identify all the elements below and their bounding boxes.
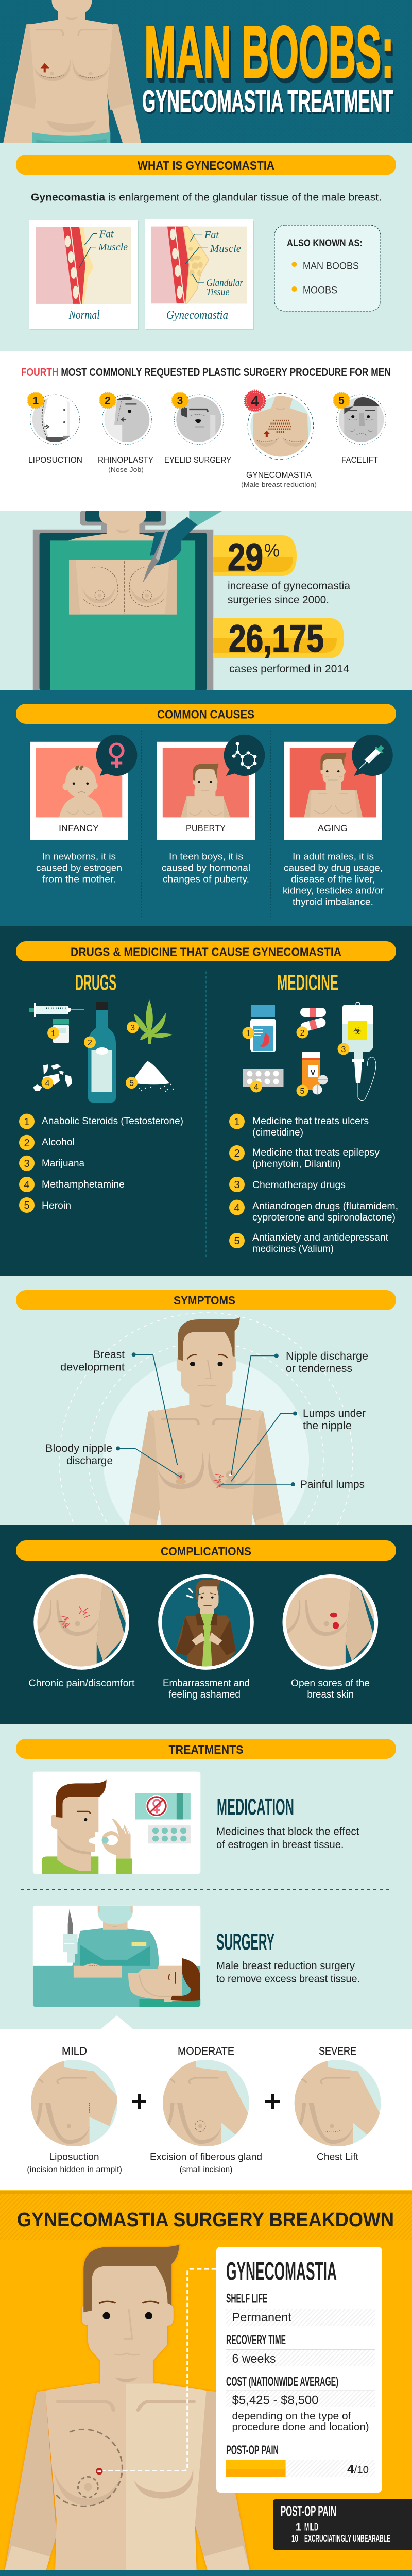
heading: complications: COMPLICATIONS xyxy=(161,1545,251,1558)
icon: mild chest xyxy=(29,2059,119,2147)
icon: alcohol bottle xyxy=(84,1002,116,1103)
list: medicine: (phenytoin, Dilantin) xyxy=(252,1159,341,1170)
label: glandular tissue: Glandular xyxy=(206,277,243,289)
text: aging cause: caused by drug usage, xyxy=(284,862,383,873)
icon: antiandrogen blister pack: 4 xyxy=(254,1083,259,1092)
icon: facelift xyxy=(337,395,386,444)
caption: gynecomastia: Gynecomastia xyxy=(166,309,228,322)
card: infancy xyxy=(30,735,137,840)
caption: excision: (small incision) xyxy=(180,2165,232,2174)
list: medicine: Antianxiety and antidepressant xyxy=(252,1232,389,1243)
panel: common causes xyxy=(0,690,412,926)
row: shelf life: Permanent xyxy=(232,2311,291,2325)
text: aging cause: disease of the liver, xyxy=(291,874,375,884)
label: bloody nipple discharge: Bloody nipple xyxy=(45,1443,112,1454)
card: puberty xyxy=(157,735,265,840)
text: medication description: Medicines that block the effect xyxy=(216,1826,359,1837)
row: recovery time: 6 weeks xyxy=(232,2352,276,2366)
stat text: increase since 2000 xyxy=(228,580,350,606)
icon: valium pill bottle xyxy=(297,1052,328,1096)
icon: embarrassed man xyxy=(160,1576,252,1671)
illustration: patient on operating table xyxy=(33,511,223,690)
panel: fourth most requested procedure xyxy=(22,368,390,488)
icon: syringe and steroid vial xyxy=(29,1003,84,1043)
text: surgery description: Male breast reduction surgery xyxy=(216,1960,355,1972)
stat text: increase since 2000: surgeries since 2000. xyxy=(228,594,329,606)
caption: embarrassment: feeling ashamed xyxy=(169,1689,241,1700)
text: infancy cause xyxy=(36,851,122,884)
icon: alcohol bottle: 2 xyxy=(88,1039,92,1047)
list: drugs: 2 xyxy=(24,1138,30,1149)
panel: surgery statistics xyxy=(0,511,412,690)
badge: number 4 xyxy=(245,391,265,411)
text: infancy cause: In newborns, it is xyxy=(42,851,116,861)
card: puberty: PUBERTY xyxy=(186,823,226,833)
icon: open sores chest xyxy=(284,1576,380,1671)
label: muscle: Muscle xyxy=(210,243,241,255)
list: medicine: Antiandrogen drugs (flutamidem, xyxy=(252,1201,398,1212)
list: drugs: Anabolic Steroids (Testosterone) xyxy=(42,1116,183,1127)
panel: footer xyxy=(0,2570,412,2576)
heading: medication: MEDICATION xyxy=(217,1794,294,1820)
label: fat: Fat xyxy=(204,229,219,241)
icon: chemotherapy IV bag xyxy=(338,1002,376,1101)
text: puberty cause: In teen boys, it is xyxy=(169,851,243,861)
card: aging xyxy=(284,735,393,840)
icon: chemotherapy IV bag: 3 xyxy=(341,1045,346,1054)
callout: also known as: MAN BOOBS xyxy=(303,261,359,272)
icon: gynecomastia chest xyxy=(248,393,314,462)
panel: drugs and medicine xyxy=(0,926,412,1276)
heading: drugs and medicine: DRUGS & MEDICINE THAT CAUSE GYNECOMASTIA xyxy=(71,945,341,959)
diagram card: normal breast xyxy=(29,220,139,330)
caption: excision xyxy=(150,2152,262,2174)
label: breast development: Breast xyxy=(93,1349,125,1361)
label: rhinoplasty: (Nose Job) xyxy=(108,466,144,473)
connector: incision to data card xyxy=(96,2269,216,2475)
badge: number 4: 4 xyxy=(251,393,259,409)
label: muscle: Muscle xyxy=(98,242,128,253)
stat pill: 29 percent xyxy=(213,535,297,579)
list: medicine: 5 xyxy=(234,1235,240,1247)
list: medicine: 4 xyxy=(234,1202,240,1214)
list: drugs: Alcohol xyxy=(42,1137,75,1148)
label: breast development: development xyxy=(60,1361,125,1374)
label: nipple discharge: Nipple discharge xyxy=(286,1350,368,1362)
text: medication description: of estrogen in breast tissue. xyxy=(216,1839,344,1851)
text: puberty cause: changes of puberty. xyxy=(163,874,249,884)
icon: ulcer medicine bottle xyxy=(242,1005,276,1052)
heading: gynecomastia surgery breakdown: GYNECOMASTIA SURGERY BREAKDOWN xyxy=(17,2209,394,2231)
data card: gynecomastia xyxy=(216,2247,382,2493)
row: cost: procedure done and location) xyxy=(232,2421,369,2433)
heading: what is gynecomastia xyxy=(16,155,396,175)
row: recovery time xyxy=(226,2333,375,2366)
label: lumps under nipple xyxy=(303,1408,366,1432)
label: rhinoplasty xyxy=(98,456,153,473)
label: painful lumps: Painful lumps xyxy=(300,1479,365,1490)
heading: common causes: COMMON CAUSES xyxy=(157,708,254,721)
badge: number 3: 3 xyxy=(177,395,183,407)
callout: also known as: ALSO KNOWN AS: xyxy=(287,238,363,249)
icon: marijuana leaf xyxy=(127,999,173,1044)
panel: surgery breakdown xyxy=(0,2190,412,2570)
definition text: Gynecomastia is enlargement of the glandular tissue of the male breast. xyxy=(31,192,382,203)
list: drugs: 4 xyxy=(24,1179,30,1191)
illustration: shirtless man with arrow and incision lines xyxy=(3,0,141,143)
pointer to surgery types xyxy=(100,2015,133,2029)
icon: eyelid surgery xyxy=(174,395,224,444)
caption: chest lift: Chest Lift xyxy=(317,2152,359,2163)
card: infancy: INFANCY xyxy=(59,823,99,833)
label: fat: Fat xyxy=(99,229,114,240)
list: medicine: 1 xyxy=(234,1116,240,1128)
label: liposuction: LIPOSUCTION xyxy=(28,456,82,465)
label: rhinoplasty: RHINOPLASTY xyxy=(98,456,153,465)
list: medicine: cyproterone and spironolactone) xyxy=(252,1212,396,1223)
leader lines xyxy=(116,1352,297,1486)
caption: embarrassment xyxy=(163,1678,250,1700)
caption: excision: Excision of fiberous gland xyxy=(150,2152,262,2163)
icon: plus xyxy=(132,2094,146,2109)
badge: number 3 xyxy=(172,393,188,408)
list: medicine xyxy=(229,1114,398,1255)
badge: number 5: 5 xyxy=(338,395,345,407)
illustration: surgeon with patient xyxy=(33,1906,200,2007)
list: drugs: Methamphetamine xyxy=(42,1179,125,1190)
diagram card: gynecomastia breast xyxy=(145,219,254,330)
text: aging cause: thyroid imbalance. xyxy=(293,896,373,907)
panel: header xyxy=(0,0,412,143)
icon: methamphetamine crystals xyxy=(33,1064,72,1091)
heading: treatments: TREATMENTS xyxy=(169,1743,243,1756)
icon: valium pill bottle: V xyxy=(310,1068,316,1077)
row: post-op pain bar: 4/10 xyxy=(347,2463,369,2477)
icon: syringe and steroid vial: 1 xyxy=(51,1029,56,1038)
illustration: man with symptom markers xyxy=(129,1317,284,1525)
list: medicine: Chemotherapy drugs xyxy=(252,1180,346,1191)
icon: heroin powder pile xyxy=(126,1061,174,1092)
label: bloody nipple discharge: discharge xyxy=(66,1455,113,1467)
label: nipple discharge xyxy=(286,1350,368,1375)
badge: number 5 xyxy=(334,393,349,408)
badge: number 1: 1 xyxy=(33,395,39,407)
list: medicine: 2 xyxy=(234,1148,240,1159)
label: eyelid surgery: EYELID SURGERY xyxy=(164,456,231,465)
legend: post-op pain scale: POST-OP PAIN xyxy=(281,2503,336,2519)
icon: capsules xyxy=(297,1008,327,1039)
text: medication description xyxy=(216,1826,359,1851)
heading: symptoms xyxy=(16,1290,396,1310)
icon: ulcer medicine bottle: 1 xyxy=(246,1029,251,1038)
stat pill: 26,175: 26,175 xyxy=(229,617,324,660)
badge: number 2: 2 xyxy=(105,395,111,407)
caption: liposuction xyxy=(27,2152,122,2174)
caption: liposuction: (incision hidden in armpit) xyxy=(27,2165,122,2174)
list: drugs: 3 xyxy=(24,1158,30,1170)
heading: treatments xyxy=(16,1739,396,1759)
caption: open sores xyxy=(291,1678,370,1700)
text: infancy cause: from the mother. xyxy=(42,874,116,884)
caption: chronic pain: Chronic pain/discomfort xyxy=(29,1678,135,1689)
list: drugs: Heroin xyxy=(42,1200,71,1211)
list: drugs xyxy=(19,1114,183,1213)
icon: methamphetamine crystals: 4 xyxy=(45,1079,50,1088)
icon: chemotherapy IV bag: ☣ xyxy=(353,1026,362,1036)
text: surgery description xyxy=(216,1960,360,1985)
heading: what is gynecomastia: WHAT IS GYNECOMASTIA xyxy=(138,159,274,172)
row: cost: depending on the type of xyxy=(232,2411,351,2422)
stat pill: 29 percent: 29 xyxy=(228,536,263,579)
text: aging cause xyxy=(283,851,384,907)
list: medicine: Medicine that treats ulcers xyxy=(252,1116,369,1127)
text: aging cause: kidney, testicles and/or xyxy=(283,886,384,896)
row: shelf life: SHELF LIFE xyxy=(226,2291,267,2306)
panel: surgery severity options xyxy=(27,2047,381,2174)
label: mild: MILD xyxy=(62,2045,87,2057)
icon: moderate chest xyxy=(161,2059,249,2147)
legend: post-op pain scale xyxy=(273,2499,412,2550)
caption: liposuction: Liposuction xyxy=(49,2152,99,2163)
list: medicine: Medicine that treats epilepsy xyxy=(252,1147,380,1158)
icon: antiandrogen blister pack xyxy=(243,1069,283,1092)
list: medicine: medicines (Valium) xyxy=(252,1244,334,1255)
caption: embarrassment: Embarrassment and xyxy=(163,1678,250,1689)
list: drugs: Marijuana xyxy=(42,1158,84,1169)
list: medicine: 3 xyxy=(234,1179,240,1191)
text: aging cause: In adult males, it is xyxy=(293,851,374,861)
heading: drugs and medicine xyxy=(16,941,396,961)
badge: number 2 xyxy=(100,393,115,408)
badge: number 1 xyxy=(28,393,44,408)
label: lumps under nipple: Lumps under xyxy=(303,1408,366,1419)
label: gynecomastia: (Male breast reduction) xyxy=(241,481,317,488)
heading: common causes xyxy=(16,704,396,724)
label: breast development xyxy=(60,1349,125,1374)
illustration: man taking pill xyxy=(33,1772,200,1874)
label: severe: SEVERE xyxy=(319,2045,356,2057)
text: puberty cause xyxy=(162,851,250,884)
legend: post-op pain scale: MILD xyxy=(304,2521,318,2533)
label: bloody nipple discharge xyxy=(45,1443,113,1467)
text: surgery description: to remove excess breast tissue. xyxy=(216,1973,360,1985)
heading: complications xyxy=(16,1540,396,1561)
list: medicine: (cimetidine) xyxy=(252,1127,303,1138)
stat text: increase since 2000: increase of gynecomastia xyxy=(228,580,350,592)
heading: surgery: SURGERY xyxy=(216,1929,274,1955)
caption: normal: Normal xyxy=(68,309,100,322)
caption: open sores: breast skin xyxy=(307,1689,354,1700)
row: shelf life xyxy=(226,2291,375,2326)
icon: rhinoplasty xyxy=(102,395,152,445)
heading: symptoms: SYMPTOMS xyxy=(174,1294,235,1307)
label: tissue: Tissue xyxy=(206,286,230,298)
label: gynecomastia: GYNECOMASTIA xyxy=(246,471,312,480)
callout: also known as: MOOBS xyxy=(303,285,337,296)
text: infancy cause: caused by estrogen xyxy=(36,862,122,873)
panel: complications xyxy=(0,1525,412,1724)
heading: medicine: MEDICINE xyxy=(277,971,338,995)
icon: heroin powder pile: 5 xyxy=(129,1079,134,1088)
card: aging: AGING xyxy=(318,823,348,833)
row: post-op pain bar xyxy=(226,2443,375,2477)
label: moderate: MODERATE xyxy=(178,2045,234,2057)
stat pill: 29 percent: % xyxy=(264,540,280,561)
panel: treatments xyxy=(0,1724,412,2029)
label: gynecomastia xyxy=(241,471,317,488)
label: lumps under nipple: the nipple xyxy=(303,1420,352,1432)
heading: drugs: DRUGS xyxy=(75,971,116,995)
illustration: man with incision marker xyxy=(5,2244,250,2570)
list: drugs: 1 xyxy=(24,1116,30,1128)
icon: severe chest xyxy=(293,2059,381,2147)
icon: valium pill bottle: 5 xyxy=(300,1087,305,1096)
row: cost: $5,425 - $8,500 xyxy=(232,2394,318,2408)
label: nipple discharge: or tenderness xyxy=(286,1363,352,1375)
icon: capsules: 2 xyxy=(300,1029,305,1038)
caption: open sores: Open sores of the xyxy=(291,1678,370,1689)
panel: what is gynecomastia xyxy=(0,143,412,351)
list: drugs: 5 xyxy=(24,1200,30,1211)
icon: chronic pain chest xyxy=(36,1576,131,1671)
stat text: cases performed: cases performed in 2014 xyxy=(229,663,349,675)
label: facelift: FACELIFT xyxy=(341,456,378,465)
row: post-op pain bar: POST-OP PAIN xyxy=(226,2443,279,2458)
icon: liposuction xyxy=(30,395,80,444)
panel: symptoms xyxy=(0,1276,412,1525)
legend: post-op pain scale: 10 xyxy=(291,2533,298,2545)
legend: post-op pain scale: 1 xyxy=(296,2521,301,2533)
text: puberty cause: caused by hormonal xyxy=(162,862,250,873)
row: recovery time: RECOVERY TIME xyxy=(226,2333,286,2347)
icon: marijuana leaf: 3 xyxy=(130,1024,135,1032)
row: cost xyxy=(226,2375,375,2433)
icon: plus xyxy=(265,2094,280,2109)
callout: also known as xyxy=(274,225,381,311)
